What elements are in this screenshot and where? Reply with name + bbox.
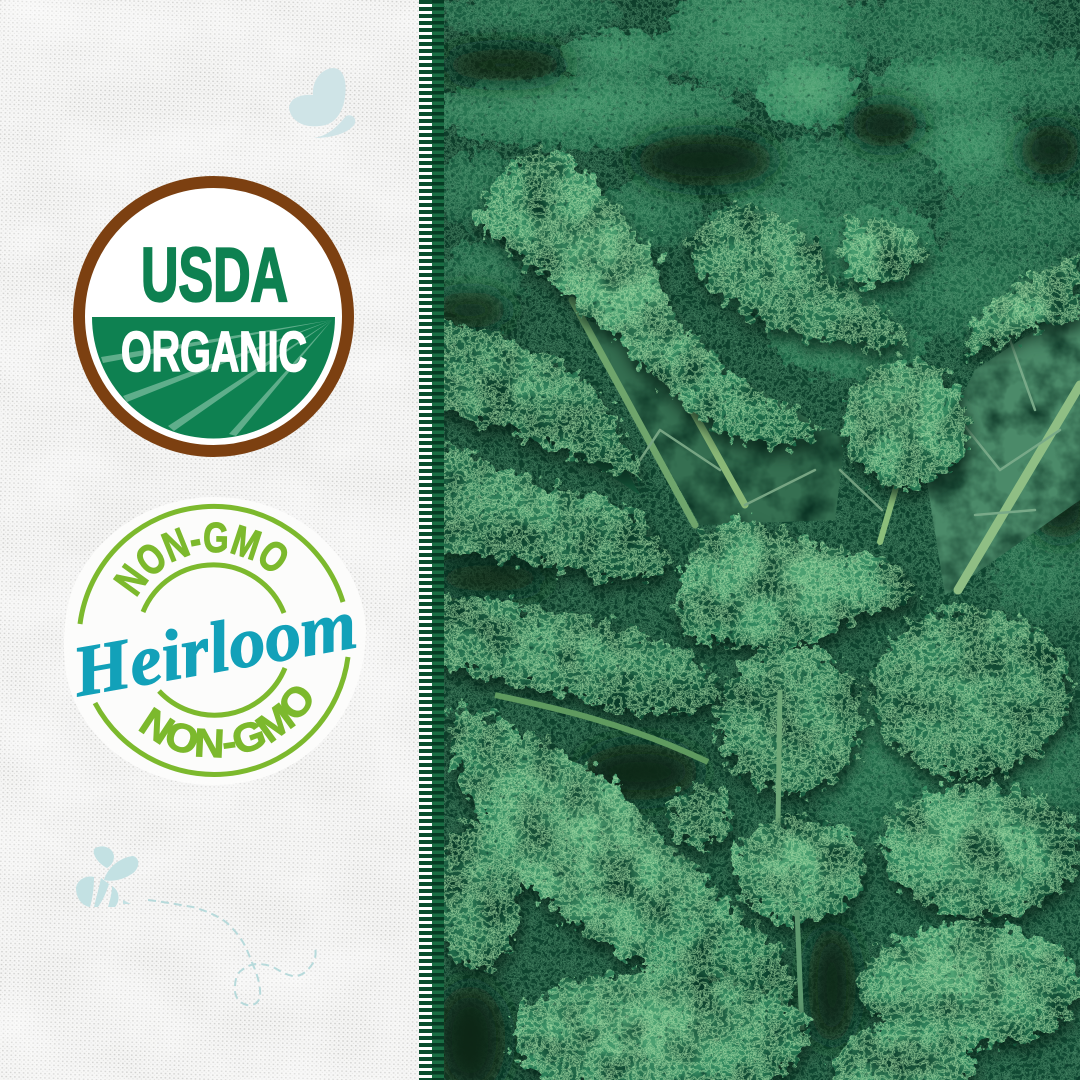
leaf plate centre <box>585 320 845 525</box>
kale: right curly cluster <box>838 217 1080 489</box>
text: NON-GMO top: NON-GMO <box>112 522 288 597</box>
seal ring <box>79 182 348 451</box>
text: USDA: USDA <box>141 233 288 318</box>
kale: bottom clusters <box>512 923 1080 1080</box>
white halo <box>64 497 366 785</box>
dark gaps between plants <box>430 49 1080 1080</box>
kale: back row leaves <box>435 0 1080 850</box>
icon: butterfly <box>289 68 355 138</box>
badge: USDA Organic seal <box>79 182 348 451</box>
kale: lower right clusters <box>668 784 1080 922</box>
icon: bee with dashed flight path <box>76 846 316 1005</box>
stems <box>572 300 1080 590</box>
photo: kale field <box>400 0 1080 1080</box>
leaf plate right <box>925 300 1080 595</box>
text: NON-GMO bottom: NON-GMO <box>138 686 312 758</box>
stem: centre <box>778 690 780 825</box>
stem: left leaf <box>495 695 708 762</box>
outer and inner rings <box>80 506 348 775</box>
kale: lower left large cluster <box>434 705 791 1012</box>
stem: lower <box>797 910 802 1030</box>
leaf plate left <box>577 452 640 495</box>
kale: main curly leaf <box>478 150 910 444</box>
bee <box>76 846 138 907</box>
decorative stitched strip <box>419 0 444 1080</box>
kale: smooth leaf plates and stems <box>435 300 1080 595</box>
kale: centre cluster <box>678 518 1070 794</box>
seal green field with rays <box>92 317 335 438</box>
text: Heirloom: Heirloom <box>66 584 362 712</box>
base foliage texture <box>400 0 1080 1080</box>
text: ORGANIC: ORGANIC <box>121 320 307 384</box>
kale: left leaves <box>435 324 722 714</box>
badge: Non-GMO Heirloom seal <box>64 497 366 785</box>
panel: linen background <box>0 0 432 1080</box>
dashed flight path <box>148 900 316 1005</box>
